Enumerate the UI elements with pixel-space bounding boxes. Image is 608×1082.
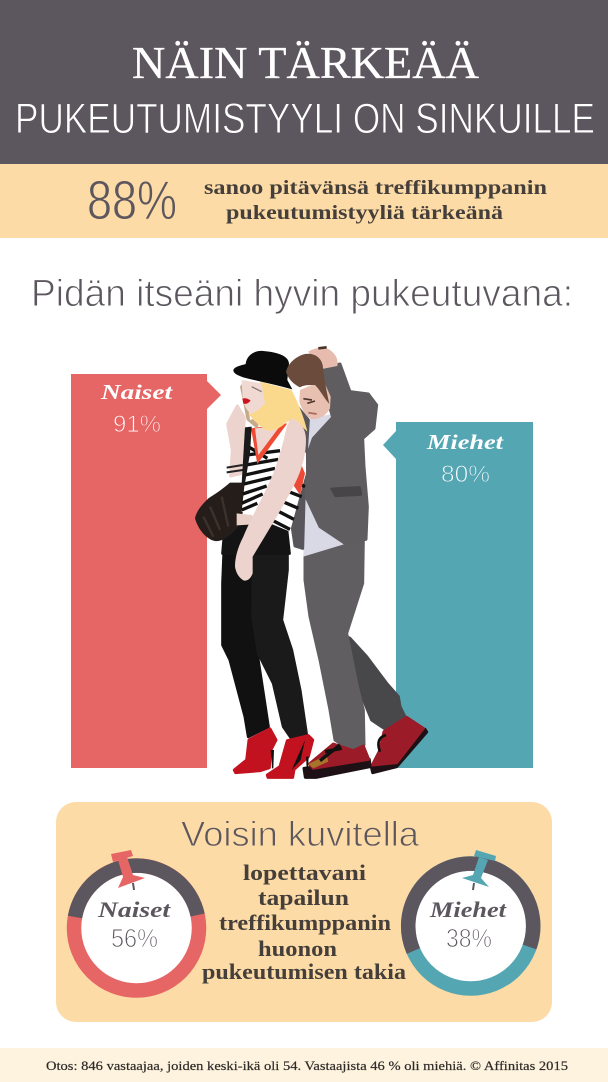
pin teal <box>462 850 496 890</box>
bar: men 80% <box>383 422 533 768</box>
stat description: sanoo pitävänsä treffikumppanin <box>204 177 547 199</box>
bar label men: Miehet <box>426 430 504 454</box>
man hand and head <box>286 347 338 419</box>
man front shoe <box>304 744 370 777</box>
stat description: pukeutumistyyliä tärkeänä <box>226 202 503 224</box>
title line 1: NÄIN TÄRKEÄÄ <box>132 37 479 88</box>
panel text: tapailun <box>258 885 349 910</box>
panel text: pukeutumisen takia <box>202 959 406 984</box>
bar value women: 91% <box>113 411 161 438</box>
woman bracelets <box>227 465 243 472</box>
stat band: 88% <box>0 164 608 238</box>
woman legs <box>223 523 307 746</box>
panel heading: Voisin kuvitella <box>181 815 420 854</box>
man front leg <box>305 540 364 750</box>
source note: Otos: 846 vastaajaa, joiden keski-ikä oli 54. Vastaajista 46 % oli miehiä. © Affinitas 2015 <box>46 1058 568 1073</box>
woman bag <box>195 483 245 541</box>
woman shoes <box>234 729 313 777</box>
woman top <box>237 423 306 532</box>
woman hair back <box>240 380 258 430</box>
bar label women: Naiset <box>100 380 174 404</box>
label men: Miehet <box>429 897 507 922</box>
illustration: fashionable couple <box>195 347 427 777</box>
pin red <box>111 850 145 890</box>
value men: 38% <box>446 923 492 953</box>
panel: would stop dating <box>56 802 552 1022</box>
man jacket <box>292 364 377 548</box>
woman left arm <box>228 406 244 476</box>
big stat 88%: 88% <box>87 169 177 231</box>
label women: Naiset <box>97 897 171 922</box>
bar value men: 80% <box>441 461 490 488</box>
panel text: lopettavani <box>243 860 366 885</box>
bar: women 91% <box>71 374 221 768</box>
woman front arm <box>235 419 306 581</box>
woman hat <box>233 351 292 389</box>
donut: women 56% <box>74 850 199 990</box>
man back shoe <box>371 717 427 773</box>
panel text: huonon <box>258 936 337 961</box>
man back leg <box>340 633 407 730</box>
woman hair <box>248 382 307 432</box>
section heading: Pidän itseäni hyvin pukeutuvana: <box>31 273 573 315</box>
footer <box>0 1048 608 1082</box>
donut: men 38% <box>408 850 533 988</box>
value women: 56% <box>111 923 158 953</box>
woman face <box>242 380 265 414</box>
header panel <box>0 0 608 164</box>
man shirt <box>303 413 345 557</box>
panel text: treffikumppanin <box>219 910 391 935</box>
